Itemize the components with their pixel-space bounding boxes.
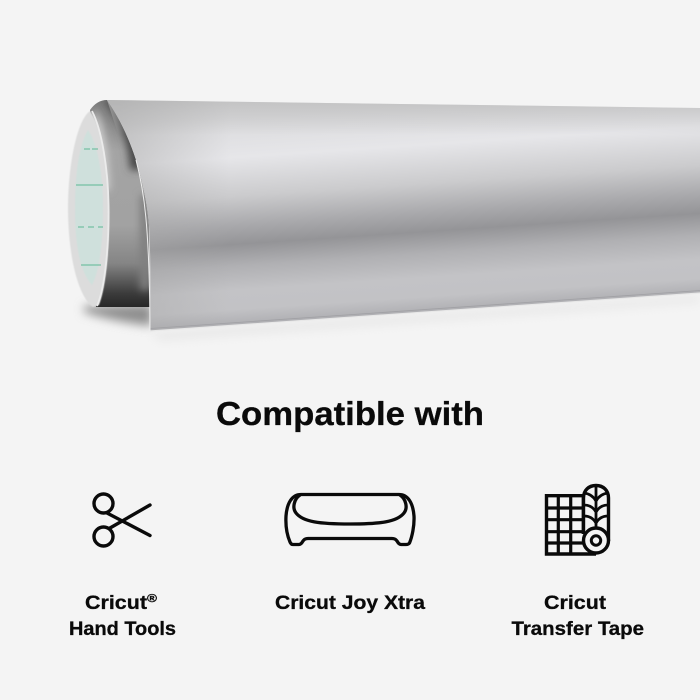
item: Cricut Transfer Tape (512, 485, 644, 640)
icon: scissors (94, 494, 150, 546)
item: Cricut Hand Tools (69, 494, 176, 640)
icon: tape roll (546, 485, 608, 554)
item: Cricut Joy Xtra (275, 494, 425, 614)
heading: Compatible with (216, 395, 484, 432)
liner grid marks (76, 149, 103, 265)
sheet left shading (107, 100, 240, 331)
label: ® (147, 593, 157, 605)
outer wrap of the roll (90, 100, 150, 307)
sheet edge highlights (136, 160, 700, 331)
label (512, 592, 644, 640)
sheet top shading (107, 100, 700, 145)
vinyl sheet (107, 100, 700, 331)
roll core: pale green liner (75, 130, 103, 285)
end of the roll: outer ring (68, 111, 109, 307)
label: Hand Tools (69, 618, 176, 640)
product photo: vinyl roll (68, 95, 700, 340)
floor shadow (84, 296, 700, 340)
roll end: rim highlight (92, 111, 109, 306)
label: Cricut (544, 592, 607, 614)
label (69, 592, 176, 640)
label: Cricut (85, 592, 148, 614)
icon: machine (286, 494, 414, 544)
label: Transfer Tape (512, 618, 644, 640)
label: Cricut Joy Xtra (275, 592, 425, 614)
